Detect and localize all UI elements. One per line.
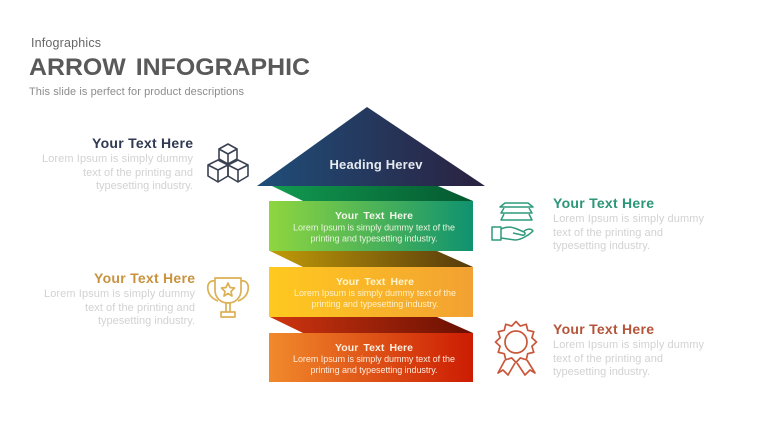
- callout: top left: typesetting industry.: [96, 180, 193, 192]
- callout: top right: Lorem Ipsum is simply dummy: [553, 213, 704, 225]
- title: ARROW INFOGRAPHIC: [29, 54, 310, 81]
- yellow band: Lorem Ipsum is simply dummy text of the: [294, 288, 456, 298]
- yellow band: printing and typesetting industry.: [312, 299, 438, 309]
- eyebrow label: Infographics: [31, 36, 101, 50]
- callout: top left: Your Text Here: [92, 135, 193, 151]
- icon: hand with layers: [492, 203, 533, 240]
- callout: bottom right: Lorem Ipsum is simply dummy: [553, 339, 704, 351]
- icon: award ribbon: [496, 322, 536, 375]
- callout: bottom right: typesetting industry.: [553, 366, 650, 378]
- callout: bottom right: [553, 321, 704, 378]
- red band: Your Text Here: [335, 342, 413, 354]
- subtitle: This slide is perfect for product descriptions: [29, 86, 244, 98]
- icon: trophy: [208, 278, 248, 317]
- green band: Your Text Here: [335, 210, 413, 222]
- callout: bottom left: text of the printing and: [85, 302, 195, 314]
- callout: bottom right: Your Text Here: [553, 321, 654, 337]
- red band: [269, 333, 473, 382]
- callout: top left: Lorem Ipsum is simply dummy: [42, 153, 194, 165]
- callout: top right: text of the printing and: [553, 227, 663, 239]
- header: [29, 36, 310, 98]
- yellow band: [269, 267, 473, 317]
- yellow band: Your Text Here: [336, 276, 414, 288]
- callout: bottom right: text of the printing and: [553, 353, 663, 365]
- yellow fold: [270, 251, 473, 267]
- arrow diagram: [257, 107, 485, 382]
- callout: bottom left: Lorem Ipsum is simply dummy: [44, 288, 196, 300]
- green band: Lorem Ipsum is simply dummy text of the: [293, 222, 455, 232]
- callout: top right: typesetting industry.: [553, 240, 650, 252]
- arrow head: Heading Herev: [330, 157, 423, 172]
- callout: bottom left: [44, 270, 196, 327]
- arrow head: [257, 107, 485, 186]
- green fold: [272, 186, 473, 201]
- callout: top left: [42, 135, 194, 192]
- red fold: [270, 317, 473, 333]
- callout: top right: Your Text Here: [553, 195, 654, 211]
- green band: [269, 201, 473, 251]
- icon: cubes: [208, 144, 248, 182]
- green band: printing and typesetting industry.: [310, 234, 438, 244]
- callout: bottom left: Your Text Here: [94, 270, 195, 286]
- callout: top left: text of the printing and: [83, 167, 193, 179]
- callout: bottom left: typesetting industry.: [98, 315, 195, 327]
- callout: top right: [553, 195, 704, 252]
- red band: Lorem Ipsum is simply dummy text of the: [293, 354, 455, 364]
- red band: printing and typesetting industry.: [310, 365, 438, 375]
